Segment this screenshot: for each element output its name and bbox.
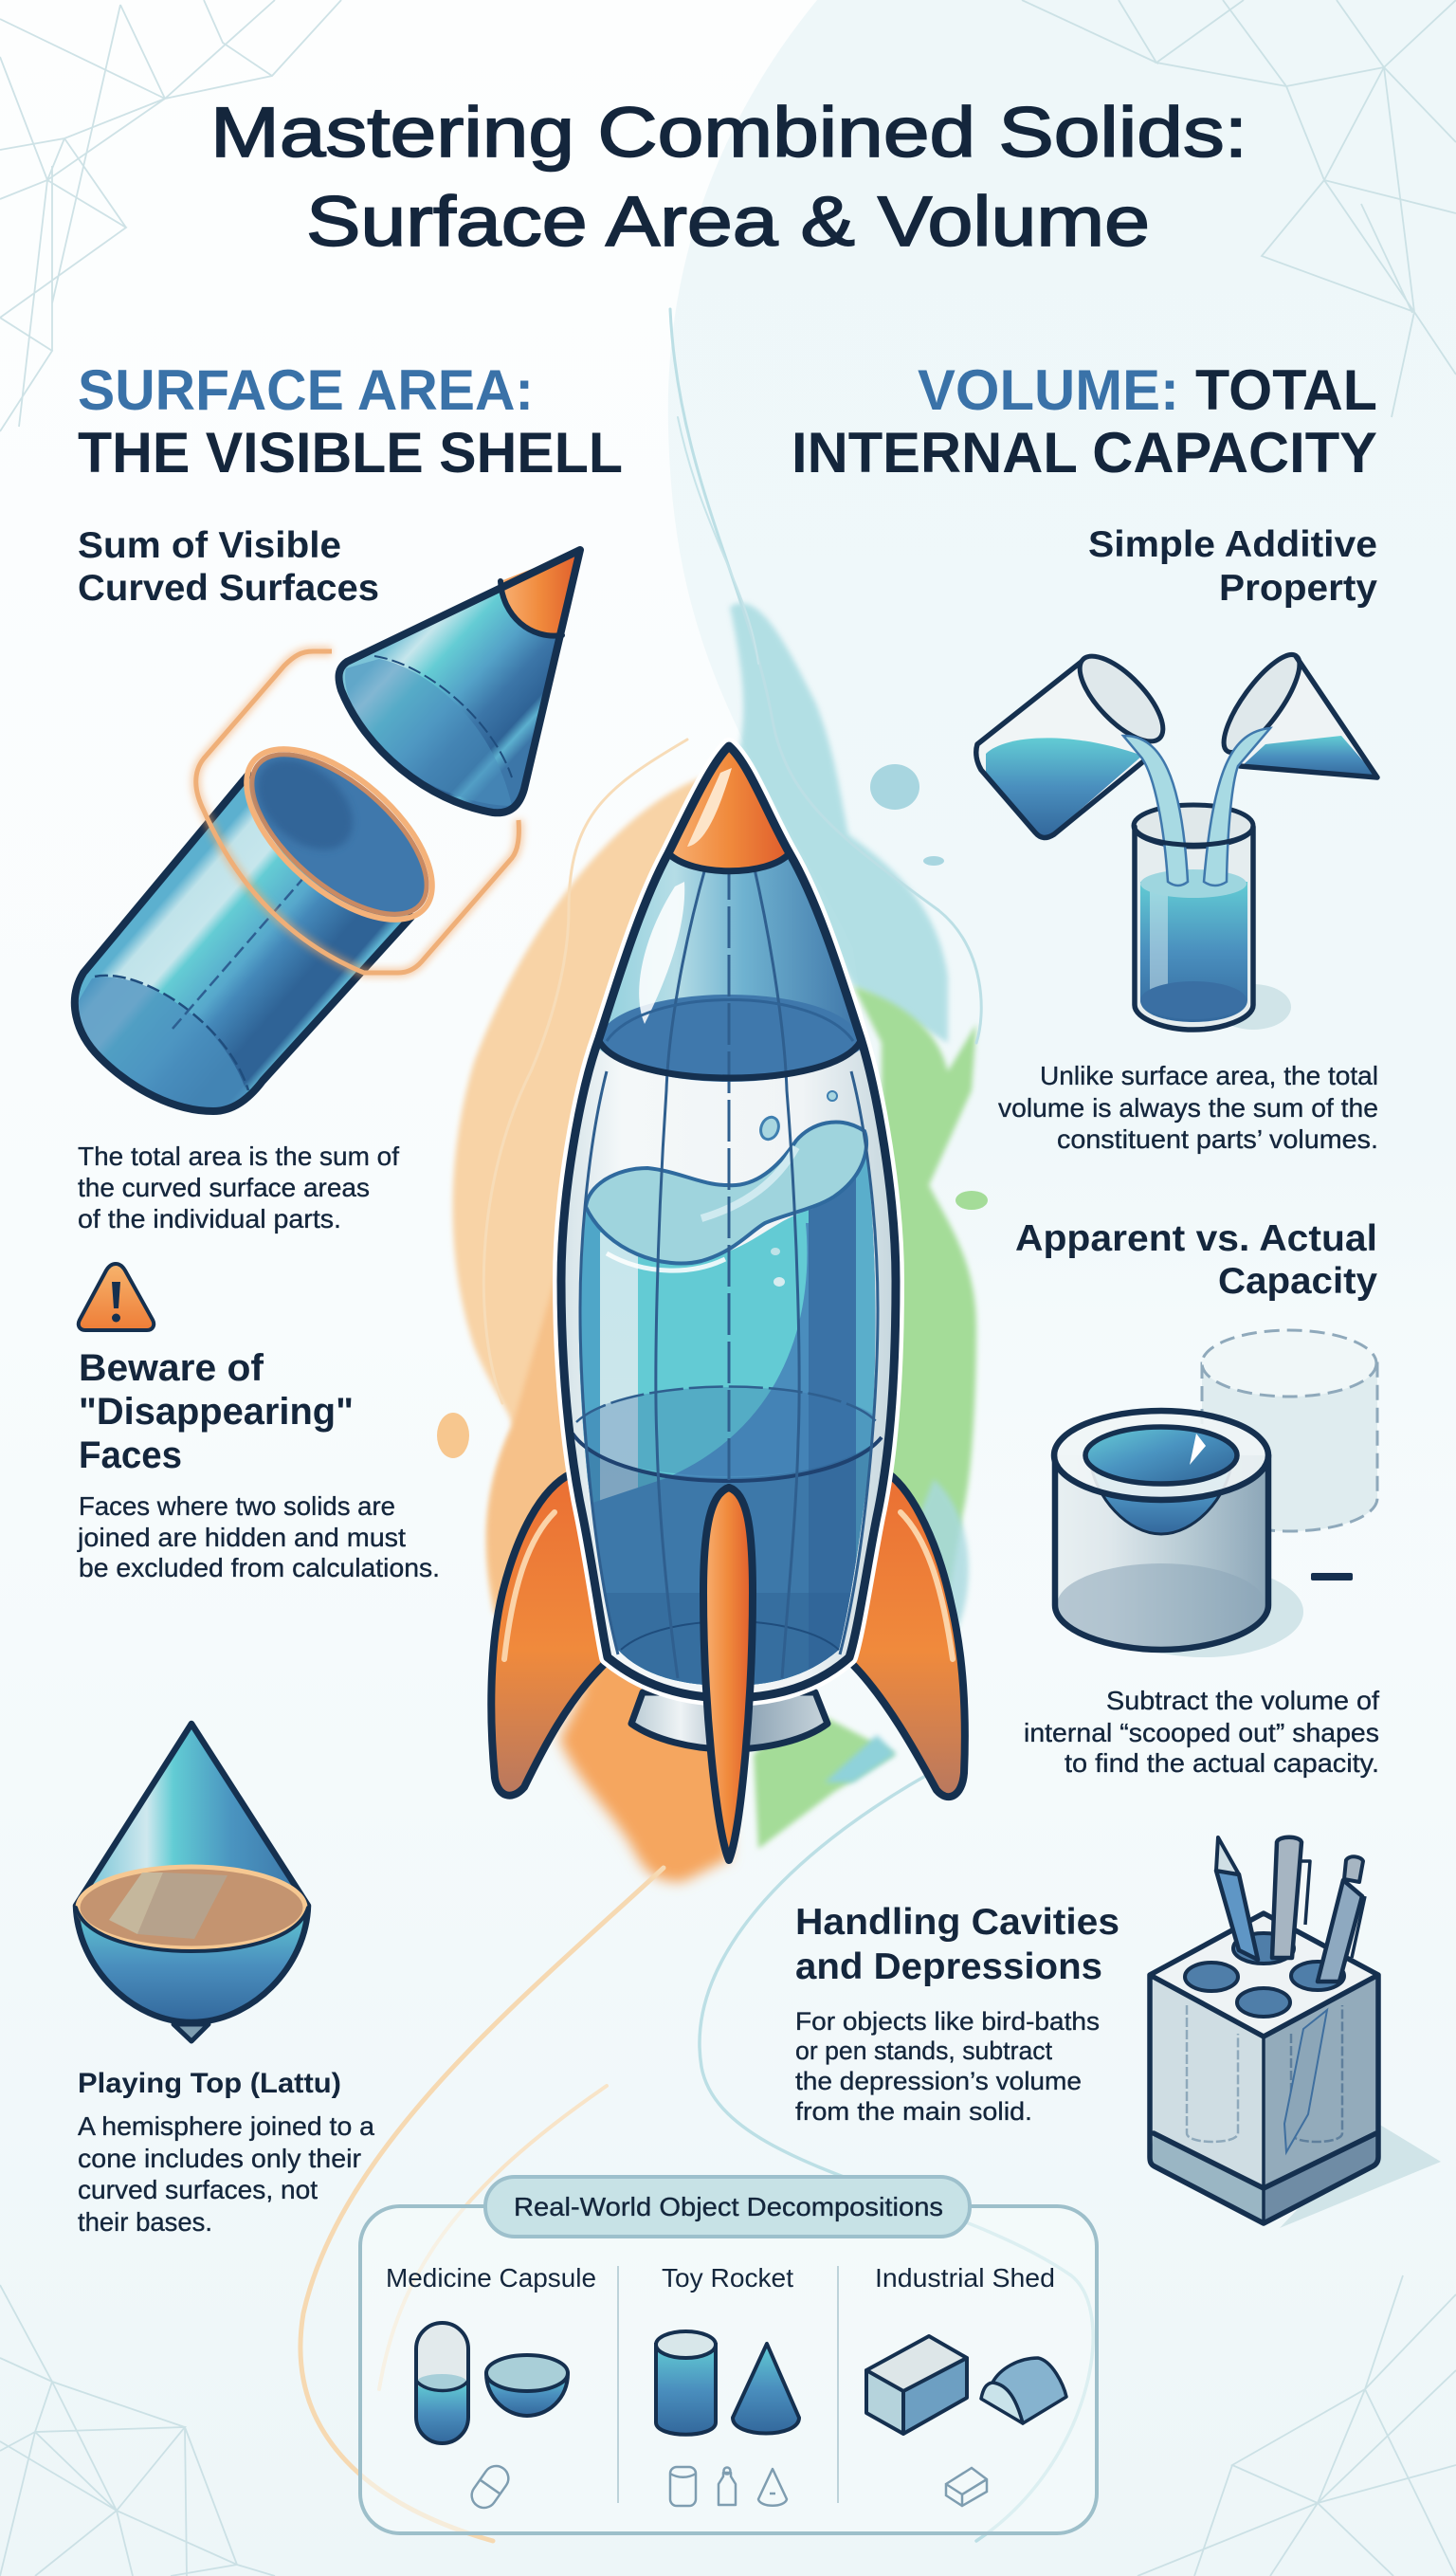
solid cylinder (1055, 1455, 1268, 1650)
heading: volume (792, 358, 1377, 484)
text: total area note: the curved surface areas (78, 1173, 370, 1202)
illustration: cylinder and cone separated (75, 550, 580, 1111)
glass (1135, 827, 1253, 1030)
small outline icons (467, 2461, 987, 2512)
text: cavities note: For objects like bird-baths (795, 2007, 1100, 2036)
right fin (849, 1473, 965, 1797)
column: toy rocket (656, 2263, 799, 2435)
subheading: disappearing faces: Beware of (79, 1347, 264, 1389)
text: playing top: curved surfaces, not (78, 2175, 318, 2204)
dashed removed shape (1202, 1363, 1377, 1531)
pouring streams (1123, 736, 1188, 886)
illustration: pen stand (1150, 1837, 1441, 2228)
column: medicine capsule: Medicine Capsule (386, 2263, 596, 2293)
panel title pill: Real-World Object Decompositions (514, 2192, 943, 2221)
subheading: sum of visible curved surfaces (78, 525, 379, 609)
band seam (599, 1041, 861, 1078)
subheading: simple additive property: Property (1219, 568, 1377, 609)
water column (578, 1158, 876, 1685)
hemisphere cavity (1090, 1460, 1232, 1534)
subheading: disappearing faces: "Disappearing" (79, 1391, 354, 1433)
text: actual capacity note (1024, 1686, 1379, 1778)
center fin (703, 1488, 753, 1860)
panel: real-world object decompositions (360, 2177, 1097, 2533)
subheading: handling cavities: and Depressions (795, 1946, 1102, 1987)
text: playing top: Playing Top (Lattu) (78, 2068, 341, 2099)
panel title pill (485, 2177, 970, 2237)
mechanical pen (1318, 1856, 1365, 1982)
illustration: playing top (76, 1724, 308, 2041)
column: industrial shed: Industrial Shed (875, 2263, 1055, 2293)
text: total area note: of the individual parts. (78, 1204, 341, 1233)
text: additive property note (998, 1061, 1378, 1154)
text: total area note (78, 1142, 399, 1233)
heading: volume: TOTAL (1195, 358, 1377, 422)
pencil (1216, 1837, 1258, 1960)
text: additive property note: constituent parts’ volumes. (1057, 1124, 1378, 1154)
text: actual capacity note: Subtract the volume of (1106, 1686, 1379, 1715)
heading: volume: INTERNAL CAPACITY (792, 421, 1377, 484)
heading: volume: VOLUME: (918, 358, 1179, 422)
subheading: simple additive property: Simple Additive (1088, 524, 1377, 565)
water surface lens (586, 1123, 866, 1264)
text: additive property note: Unlike surface area, the total (1040, 1061, 1378, 1090)
text: playing top: A hemisphere joined to a (78, 2111, 374, 2141)
subheading: apparent vs actual capacity: Apparent vs. Actual (1015, 1218, 1377, 1259)
subheading: simple additive property (1088, 524, 1377, 609)
subheading: disappearing faces (79, 1347, 354, 1476)
minus sign (1311, 1573, 1353, 1580)
glass inner wall (580, 858, 878, 1688)
subheading: handling cavities: Handling Cavities (795, 1902, 1119, 1943)
seam (573, 1434, 882, 1481)
illustration: pouring beakers into glass (976, 644, 1377, 1030)
illustration: scooped cylinder minus shape (1054, 1330, 1377, 1657)
rocket interior (565, 859, 891, 1692)
text: disappearing faces note: Faces where two solids are (79, 1491, 395, 1521)
text: disappearing faces note (77, 1491, 440, 1582)
text: disappearing faces note: be excluded from calculations. (79, 1553, 440, 1582)
subheading: sum of visible curved surfaces: Curved Surfaces (78, 568, 379, 609)
text: cavities note: or pen stands, subtract (795, 2037, 1052, 2065)
right cone beaker (1228, 656, 1377, 777)
pen (1272, 1837, 1310, 1958)
watercolor washes behind rocket (300, 309, 1093, 2541)
heading: surface area: SURFACE AREA: (78, 358, 534, 422)
column: industrial shed (866, 2263, 1066, 2434)
text: playing top (78, 2068, 374, 2237)
left beaker (976, 661, 1158, 838)
text: cavities note: the depression’s volume (795, 2067, 1082, 2095)
text: cavities note: from the main solid. (795, 2097, 1032, 2126)
text: cavities note (795, 2007, 1100, 2126)
rocket body (561, 746, 896, 1698)
illustration: central rocket (491, 746, 965, 1860)
text: playing top: their bases. (78, 2207, 212, 2237)
nose cone (668, 746, 790, 871)
column: toy rocket: Toy Rocket (662, 2263, 793, 2293)
text: actual capacity note: internal “scooped out” shapes (1024, 1718, 1379, 1747)
body outline (561, 746, 896, 1698)
text: disappearing faces note: joined are hidden and must (77, 1523, 406, 1552)
subheading: disappearing faces: Faces (79, 1434, 182, 1476)
heading: surface area (78, 358, 623, 484)
subheading: apparent vs actual capacity (1015, 1218, 1377, 1302)
text: actual capacity note: to find the actual capacity. (1065, 1748, 1379, 1778)
title: Surface Area & Volume (306, 182, 1150, 261)
icon: warning triangle (79, 1264, 154, 1330)
column: medicine capsule (386, 2263, 596, 2443)
title (210, 93, 1247, 261)
subheading: handling cavities (795, 1902, 1119, 1987)
subheading: apparent vs actual capacity: Capacity (1218, 1261, 1377, 1302)
text: playing top: cone includes only their (78, 2144, 361, 2173)
title: Mastering Combined Solids: (210, 93, 1247, 172)
left fin (491, 1473, 608, 1796)
text: total area note: The total area is the sum of (78, 1142, 399, 1171)
subheading: sum of visible curved surfaces: Sum of Visible (78, 525, 341, 566)
nozzle (631, 1692, 828, 1749)
heading: surface area: THE VISIBLE SHELL (78, 421, 623, 484)
text: additive property note: volume is always the sum of the (998, 1093, 1378, 1123)
